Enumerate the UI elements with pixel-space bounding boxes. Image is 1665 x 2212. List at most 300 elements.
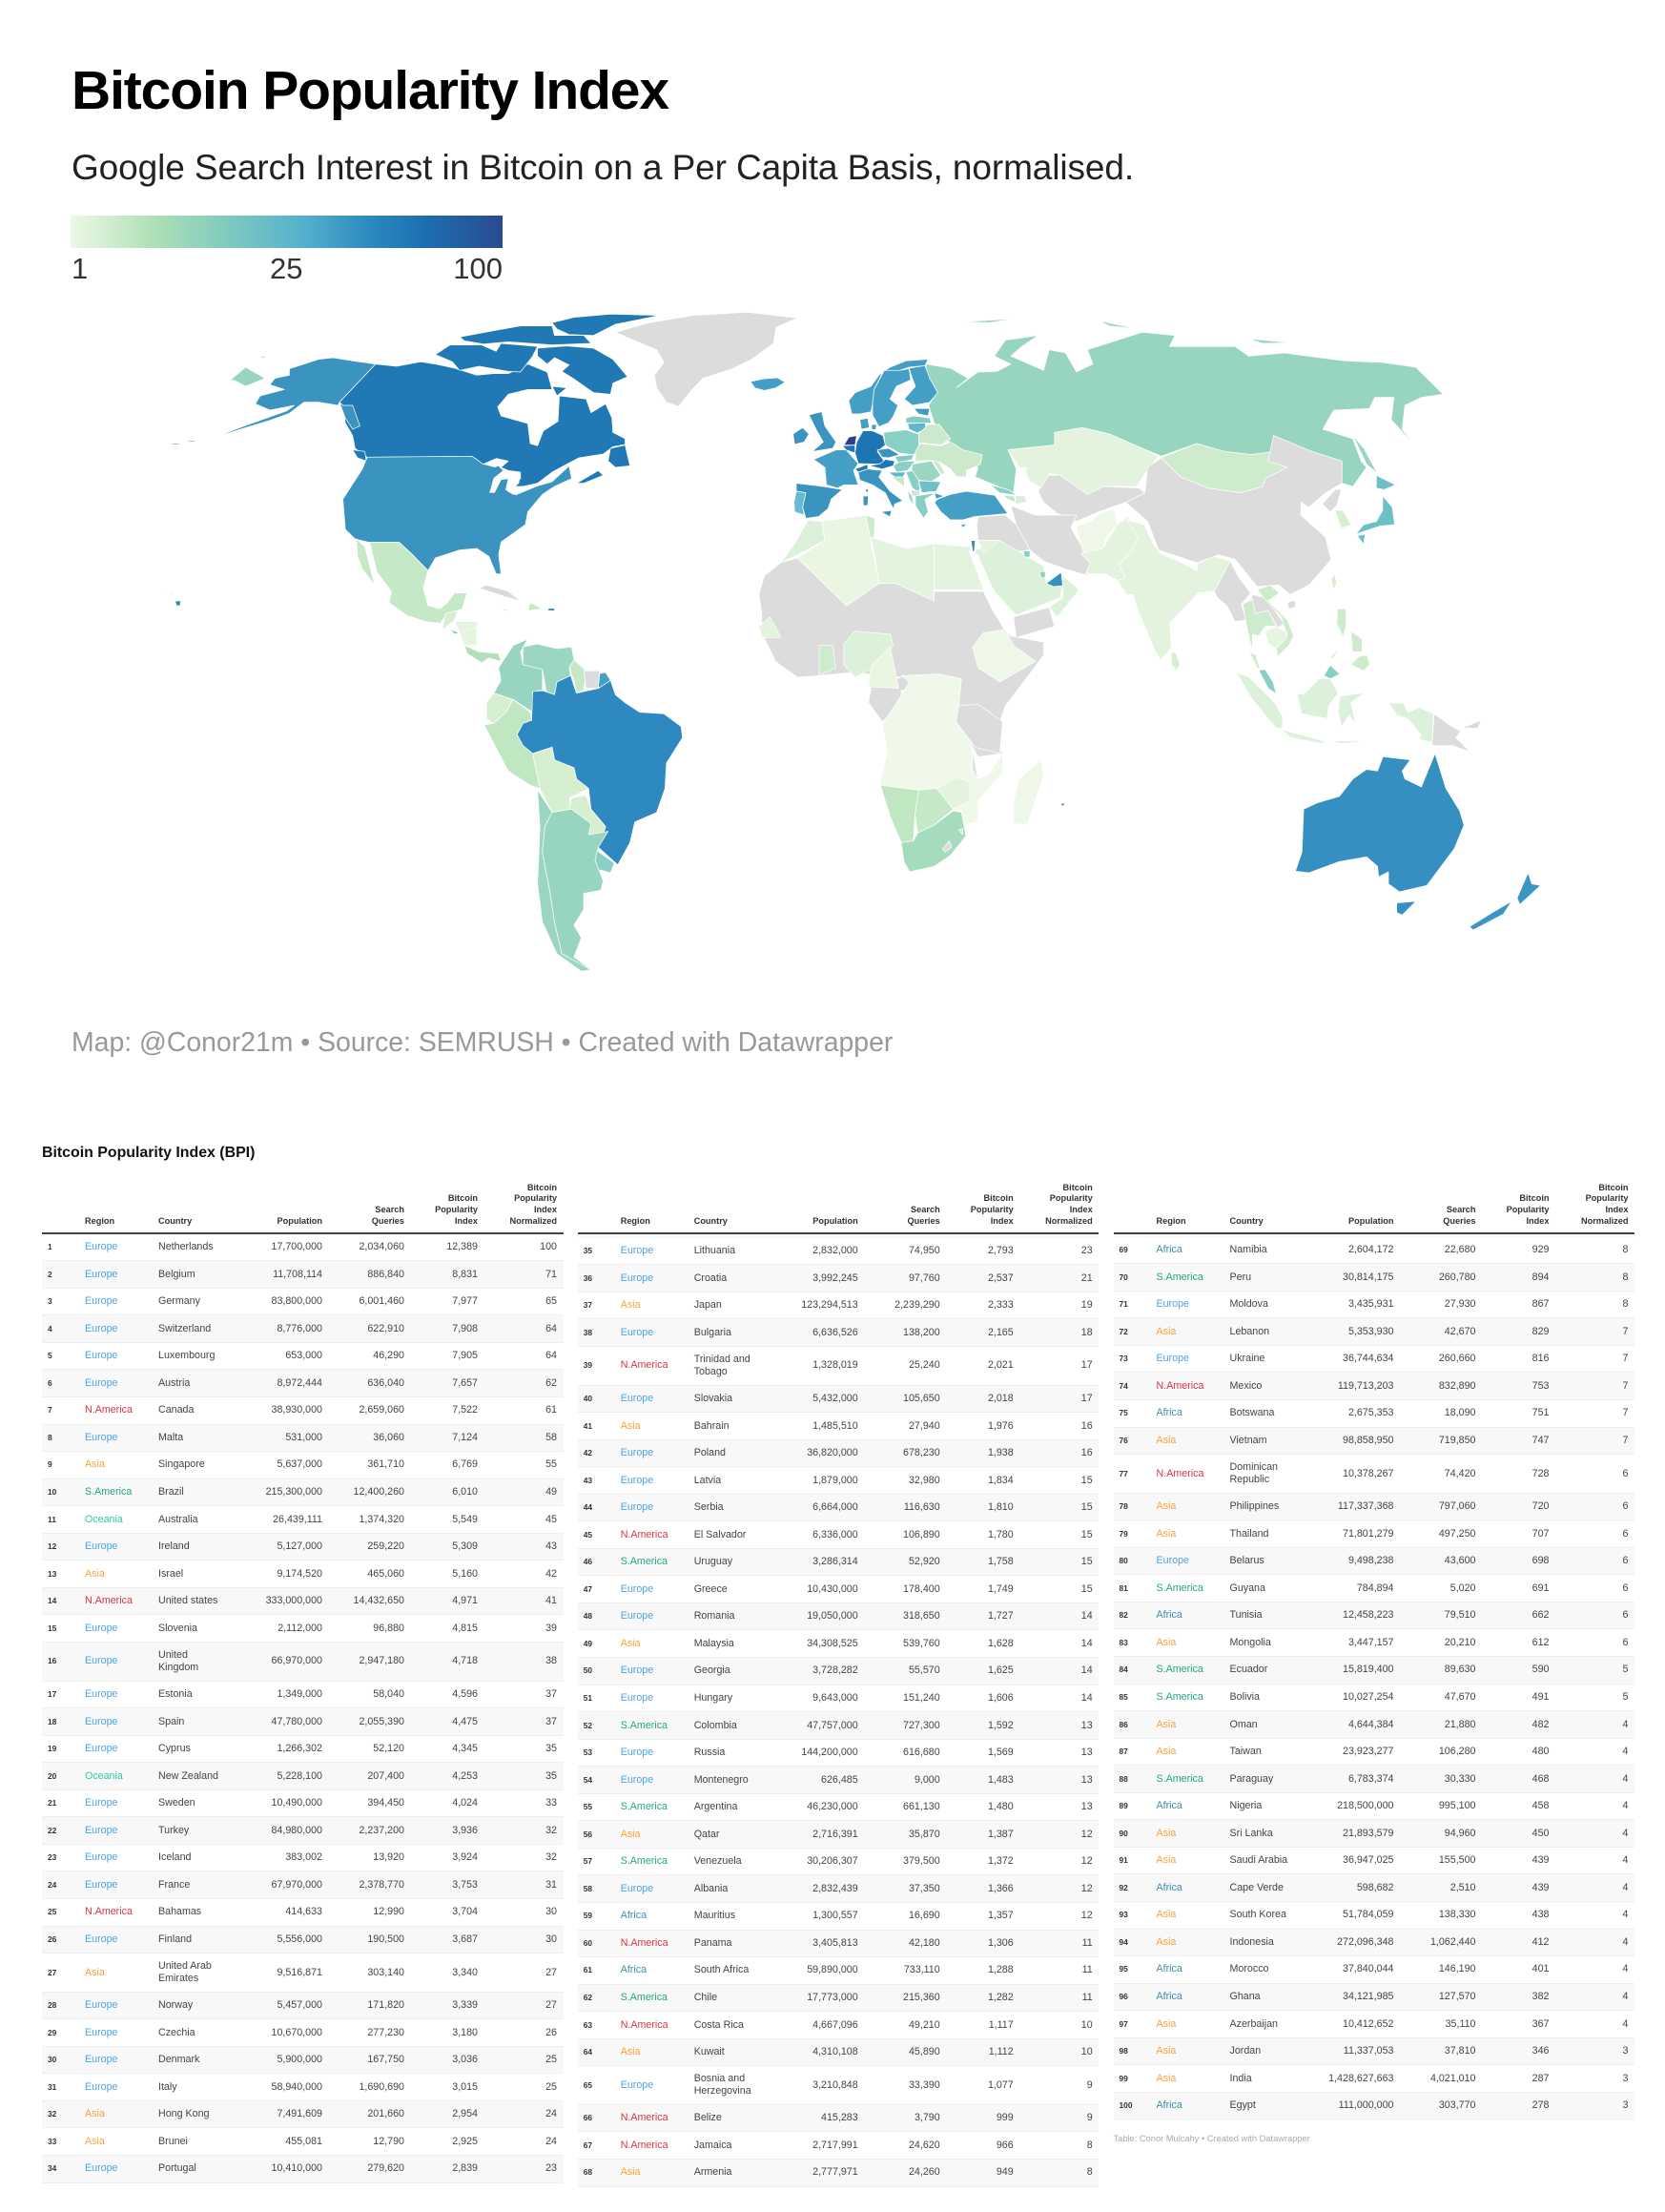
table rows: Chile: [694, 1992, 717, 2003]
table rows: 4: [48, 1324, 52, 1333]
table rows: N.America: [621, 2112, 668, 2123]
table rows: 4: [1623, 1936, 1629, 1948]
table rows: 42,180: [909, 1937, 940, 1949]
table rows: 19: [48, 1744, 56, 1753]
table rows: S.America: [621, 1556, 668, 1567]
table header: Country: [694, 1216, 728, 1226]
table rows: Azerbaijan: [1230, 2018, 1278, 2030]
Colombia: [494, 639, 543, 713]
Myanmar: [1214, 561, 1251, 622]
table rows: 3,728,282: [812, 1664, 858, 1676]
table rows: 626,485: [821, 1774, 858, 1786]
North Korea: [1323, 489, 1342, 512]
table rows: 8: [1623, 1271, 1629, 1283]
table rows: 259,220: [367, 1540, 404, 1552]
table rows: 3,704: [452, 1906, 478, 1917]
table rows: Kingdom: [158, 1662, 198, 1673]
table rows: 1,625: [988, 1664, 1014, 1676]
table rows: Denmark: [158, 2054, 199, 2065]
table header: Queries: [1443, 1216, 1476, 1226]
Egypt: [935, 544, 983, 589]
table rows: Taiwan: [1230, 1746, 1262, 1757]
table rows: 886,840: [367, 1269, 404, 1280]
Argentina: [543, 809, 608, 970]
table rows: Europe: [85, 2081, 117, 2093]
table rows: 4,253: [452, 1770, 478, 1782]
table rows: 4: [1623, 1719, 1629, 1730]
table rows: Lebanon: [1230, 1326, 1269, 1337]
table rows: 27: [545, 1967, 557, 1978]
table rows: Africa: [1156, 1244, 1182, 1255]
table rows: 59: [584, 1911, 592, 1920]
table rows: 4: [1623, 1773, 1629, 1785]
table rows: 678,230: [903, 1447, 940, 1458]
table rows: 12: [1081, 1910, 1093, 1921]
table rows: 29: [48, 2028, 56, 2037]
Central Asia: [1038, 475, 1145, 522]
Israel: [971, 541, 976, 551]
table rows: 318,650: [903, 1610, 940, 1622]
table rows: 719,850: [1439, 1435, 1476, 1446]
table rows: 9,516,871: [277, 1967, 322, 1978]
table rows: 9: [48, 1459, 52, 1469]
table rows: 5: [1623, 1664, 1629, 1675]
table rows: 60: [584, 1938, 592, 1948]
table rows: 117,337,368: [1338, 1500, 1394, 1512]
table rows: 111,000,000: [1339, 2099, 1394, 2111]
table rows: 30: [545, 1933, 557, 1945]
table rows: 97,760: [909, 1272, 940, 1284]
table rows: 31: [545, 1879, 557, 1891]
table rows: 30: [48, 2055, 56, 2064]
table rows: 1,592: [988, 1720, 1014, 1731]
table rows: Qatar: [694, 1829, 719, 1840]
table header: Popularity: [435, 1205, 478, 1214]
table rows: 10,670,000: [271, 2027, 322, 2038]
table rows: S.America: [85, 1486, 132, 1498]
table rows: 38: [584, 1328, 592, 1337]
table rows: 100: [1120, 2100, 1132, 2110]
table rows: 171,820: [367, 1999, 404, 2011]
table rows: 2,537: [988, 1272, 1014, 1284]
table rows: 468: [1532, 1773, 1549, 1785]
table rows: Belgium: [158, 1269, 195, 1280]
Portugal: [794, 491, 806, 515]
table rows: 6: [1623, 1500, 1629, 1512]
table rows: 999: [997, 2112, 1014, 2123]
table rows: 361,710: [367, 1458, 404, 1470]
Sri Lanka: [1171, 651, 1180, 671]
table header: [578, 1166, 1099, 1234]
table rows: 20: [48, 1771, 56, 1781]
table rows: 69: [1120, 1245, 1128, 1254]
table rows: 439: [1532, 1882, 1549, 1893]
table rows: Bahamas: [158, 1906, 201, 1917]
table rows: 12,458,223: [1343, 1609, 1394, 1621]
table rows: 94,960: [1445, 1828, 1476, 1839]
table rows: 1,372: [988, 1855, 1014, 1867]
table rows: Ukraine: [1230, 1353, 1264, 1364]
table rows: Herzegovina: [694, 2085, 751, 2097]
table rows: 138,330: [1439, 1909, 1476, 1920]
table rows: Europe: [85, 1879, 117, 1891]
table rows: N.America: [621, 1529, 668, 1540]
table rows: 24,620: [909, 2140, 940, 2151]
table rows: 24: [545, 2136, 557, 2147]
table rows: 77: [1120, 1469, 1128, 1478]
table rows: Africa: [621, 1964, 647, 1975]
table rows: 61: [584, 1965, 592, 1974]
Thailand: [1243, 599, 1276, 670]
table rows: 3,435,931: [1348, 1298, 1394, 1310]
table rows: 5,228,100: [277, 1770, 322, 1782]
table rows: Asia: [1156, 1500, 1176, 1512]
table rows: 747: [1532, 1435, 1549, 1446]
Greenland: [615, 312, 798, 406]
table rows: 22: [48, 1826, 56, 1835]
South America: [484, 639, 683, 971]
Ecuador: [486, 693, 513, 723]
table rows: 13: [48, 1569, 56, 1579]
table rows: 367: [1532, 2018, 1549, 2030]
table rows: 18: [48, 1717, 56, 1726]
table rows: 401: [1532, 1963, 1549, 1974]
table rows: 4,644,384: [1348, 1719, 1394, 1730]
table rows: 106,280: [1439, 1746, 1476, 1757]
table rows: Republic: [1230, 1474, 1269, 1485]
table rows: Europe: [85, 1269, 117, 1280]
table rows: 7,124: [452, 1432, 478, 1443]
table rows: Jamaica: [694, 2140, 731, 2151]
table rows: 80: [1120, 1556, 1128, 1565]
table rows: 1,428,627,663: [1328, 2073, 1394, 2084]
table rows: 4: [1623, 1854, 1629, 1866]
Red Sea: [968, 550, 1014, 636]
table rows: Argentina: [694, 1801, 737, 1812]
Hungary: [894, 461, 915, 472]
table rows: Europe: [85, 1540, 117, 1552]
table rows: 2,112,000: [278, 1623, 322, 1634]
table header: Country: [1230, 1216, 1264, 1226]
table rows: 3,405,813: [812, 1937, 858, 1949]
table rows: 23,923,277: [1343, 1746, 1394, 1757]
Taiwan: [1331, 574, 1337, 589]
table rows: 303,770: [1439, 2099, 1476, 2111]
Philippines: [1330, 609, 1370, 671]
table rows: 215,300,000: [266, 1486, 322, 1498]
table rows: 1,758: [988, 1556, 1014, 1567]
table rows: 11,337,053: [1344, 2045, 1394, 2057]
table rows: [578, 1245, 1099, 2187]
table rows: 167,750: [367, 2054, 404, 2065]
table rows: 14: [48, 1596, 56, 1605]
table rows: Bolivia: [1230, 1691, 1260, 1703]
table header: Search: [911, 1205, 940, 1214]
table rows: 56: [584, 1830, 592, 1839]
table rows: 67,970,000: [271, 1879, 322, 1891]
Peru: [484, 699, 540, 789]
table rows: 178,400: [903, 1583, 940, 1595]
table rows: 36,060: [373, 1432, 404, 1443]
table rows: 151,240: [903, 1692, 940, 1704]
table rows: 1,976: [988, 1420, 1014, 1432]
table rows: 5,020: [1450, 1582, 1476, 1594]
table rows: Ecuador: [1230, 1664, 1267, 1675]
table rows: 24: [545, 2108, 557, 2119]
table rows: 4: [1623, 2018, 1629, 2030]
table rows: Brunei: [158, 2136, 188, 2147]
table rows: N.America: [621, 2019, 668, 2031]
table rows: 949: [997, 2166, 1014, 2178]
table rows: 1,328,019: [812, 1359, 858, 1371]
table rows: Germany: [158, 1295, 200, 1307]
table rows: 18: [1081, 1327, 1093, 1338]
table rows: 43: [584, 1476, 592, 1485]
table rows: 8: [1087, 2166, 1093, 2178]
table rows: 2,659,060: [359, 1404, 404, 1416]
table rows: 14: [1081, 1664, 1093, 1676]
table rows: 5,160: [452, 1568, 478, 1580]
table rows: Africa: [1156, 1882, 1182, 1893]
table rows: 382: [1532, 1991, 1549, 2002]
Norway: [849, 360, 928, 414]
table header: [42, 1166, 563, 1234]
table rows: 23: [1081, 1245, 1093, 1256]
table rows: 10,027,254: [1343, 1691, 1394, 1703]
table header: Queries: [372, 1216, 404, 1226]
table rows: Europe: [85, 1655, 117, 1666]
Malaysia: [1259, 665, 1340, 694]
Gulf states: [1023, 551, 1045, 578]
Bosnia and Herzegovina: [892, 477, 904, 486]
table rows: 383,002: [285, 1851, 322, 1863]
table rows: 106,890: [903, 1529, 940, 1540]
table rows: 1,349,000: [277, 1688, 322, 1700]
table rows: S.America: [621, 1855, 668, 1867]
table rows: 13,920: [373, 1851, 404, 1863]
table rows: 21: [48, 1798, 56, 1808]
table rows: 9,000: [915, 1774, 940, 1786]
table rows: 966: [997, 2140, 1014, 2151]
table rows: 458: [1532, 1800, 1549, 1811]
Nigeria: [844, 631, 894, 677]
table rows: 3,687: [452, 1933, 478, 1945]
table header: Region: [1156, 1216, 1186, 1226]
table rows: 90: [1120, 1829, 1128, 1838]
table rows: 95: [1120, 1964, 1128, 1974]
table rows: Africa: [1156, 1991, 1182, 2002]
table rows: 333,000,000: [266, 1595, 322, 1606]
table rows: 8,972,444: [277, 1377, 322, 1389]
table rows: Europe: [85, 1851, 117, 1863]
table header: Popularity: [1050, 1193, 1093, 1203]
table rows: 17: [1081, 1393, 1093, 1404]
table rows: 2,954: [452, 2108, 478, 2119]
table rows: 720: [1532, 1500, 1549, 1512]
Senegal: [759, 617, 781, 637]
table rows: 1,485,510: [812, 1420, 858, 1432]
table rows: 88: [1120, 1774, 1128, 1784]
table rows: 39: [545, 1623, 557, 1634]
table rows: 54: [584, 1775, 592, 1785]
table rows: 4: [1623, 1882, 1629, 1893]
table rows: 455,081: [285, 2136, 322, 2147]
table rows: 13: [1081, 1801, 1093, 1812]
table rows: 653,000: [285, 1350, 322, 1361]
Namibia: [880, 785, 919, 842]
table rows: 2,055,390: [359, 1716, 404, 1727]
table rows: 34,121,985: [1343, 1991, 1394, 2002]
Iran: [1011, 506, 1093, 575]
table header: Index: [1606, 1205, 1629, 1214]
table rows: Saudi Arabia: [1230, 1854, 1287, 1866]
table rows: Asia: [1156, 1326, 1176, 1337]
table rows: 480: [1532, 1746, 1549, 1757]
table rows: Vietnam: [1230, 1435, 1267, 1446]
table rows: Europe: [621, 1475, 653, 1486]
table rows: Panama: [694, 1937, 732, 1949]
table rows: 1,306: [988, 1937, 1014, 1949]
table rows: 439: [1532, 1854, 1549, 1866]
table rows: 41: [584, 1421, 592, 1431]
Tanzania and Malawi: [956, 704, 1002, 779]
table rows: Europe: [85, 1323, 117, 1334]
table rows: 11: [1082, 1964, 1093, 1975]
table rows: 6,010: [452, 1486, 478, 1498]
table header: Population: [812, 1216, 858, 1226]
table rows: Africa: [1156, 1963, 1182, 1974]
table rows: Europe: [85, 1797, 117, 1809]
table rows: Ghana: [1230, 1991, 1261, 2002]
table rows: 63: [584, 2020, 592, 2030]
table rows: 44: [584, 1502, 592, 1512]
table rows: 37: [545, 1688, 557, 1700]
table rows: 31: [48, 2082, 56, 2092]
table rows: Brazil: [158, 1486, 184, 1498]
table rows: Belarus: [1230, 1555, 1264, 1566]
table rows: 36,820,000: [807, 1447, 858, 1458]
Austria: [870, 460, 894, 469]
table rows: 465,060: [367, 1568, 404, 1580]
table rows: 7: [1623, 1326, 1629, 1337]
table rows: Slovenia: [158, 1623, 197, 1634]
table rows: 53: [584, 1747, 592, 1757]
table rows: Asia: [1156, 2073, 1176, 2084]
table rows: 3,339: [452, 1999, 478, 2011]
table rows: Asia: [85, 2136, 105, 2147]
table rows: 1,117: [989, 2019, 1014, 2031]
table rows: 30,206,307: [807, 1855, 858, 1867]
table header: Bitcoin: [527, 1183, 557, 1192]
table rows: Europe: [621, 1883, 653, 1894]
table rows: 42: [584, 1448, 592, 1457]
table rows: 42,670: [1445, 1326, 1476, 1337]
table rows: 4: [1623, 1909, 1629, 1920]
table rows: 6: [1623, 1528, 1629, 1540]
table rows: 23: [48, 1852, 56, 1862]
table rows: 62: [545, 1377, 557, 1389]
table rows: 3,790: [915, 2112, 940, 2123]
table rows: 119,713,203: [1338, 1380, 1394, 1392]
Lithuania: [908, 423, 927, 433]
table rows: Europe: [85, 1350, 117, 1361]
table rows: 995,100: [1439, 1800, 1476, 1811]
table rows: 201,660: [367, 2108, 404, 2119]
table rows: 71,801,279: [1343, 1528, 1394, 1540]
Sweden: [873, 369, 911, 426]
Denmark: [860, 418, 876, 430]
Morocco: [781, 520, 825, 563]
table rows: Egypt: [1230, 2099, 1256, 2111]
table rows: 5,127,000: [277, 1540, 322, 1552]
table rows: 6: [1623, 1609, 1629, 1621]
table rows: Asia: [1156, 1828, 1176, 1839]
table header: Index: [534, 1205, 557, 1214]
table rows: 2: [48, 1270, 52, 1279]
table rows: 99: [1120, 2074, 1128, 2083]
table rows: Kuwait: [694, 2046, 725, 2057]
table source note: Table: Conor Mulcahy • Created with Datawrapper: [1114, 2134, 1310, 2143]
table rows: N.America: [1156, 1468, 1203, 1479]
table rows: S.America: [1156, 1664, 1203, 1675]
table rows: 2,510: [1450, 1882, 1476, 1893]
South and Southeast Asia: [1076, 475, 1481, 752]
table rows: Botswana: [1230, 1407, 1274, 1418]
table rows: 2,604,172: [1348, 1244, 1394, 1255]
table header: Index: [1070, 1205, 1093, 1214]
table rows: 1,062,440: [1430, 1936, 1476, 1948]
table rows: 9: [1087, 2079, 1093, 2091]
table rows: 15: [48, 1623, 56, 1633]
table rows: 138,200: [903, 1327, 940, 1338]
table rows: Europe: [621, 1327, 653, 1338]
table rows: 4,345: [452, 1743, 478, 1754]
table rows: 728: [1532, 1468, 1549, 1479]
table rows: 43,600: [1445, 1555, 1476, 1566]
table rows: Oman: [1230, 1719, 1258, 1730]
Armenia: [1003, 495, 1016, 503]
table rows: 11,708,114: [273, 1269, 322, 1280]
table rows: 12: [48, 1541, 56, 1551]
table rows: 751: [1532, 1407, 1549, 1418]
table rows: 6: [1623, 1468, 1629, 1479]
Alaska: [173, 358, 376, 444]
table rows: 25,240: [909, 1359, 940, 1371]
Ghana: [819, 646, 835, 675]
table header: Normalized: [1581, 1216, 1629, 1226]
table rows: 37,810: [1445, 2045, 1476, 2057]
table header: Bitcoin: [1519, 1193, 1549, 1203]
table rows: 698: [1532, 1555, 1549, 1566]
table rows: Asia: [621, 2166, 640, 2178]
table rows: Oceania: [85, 1514, 123, 1525]
table rows: New Zealand: [158, 1770, 218, 1782]
table rows: 482: [1532, 1719, 1549, 1730]
table rows: 260,660: [1439, 1353, 1476, 1364]
table rows: 55: [545, 1458, 557, 1470]
table rows: 70: [1120, 1272, 1128, 1282]
table rows: 598,682: [1357, 1882, 1394, 1893]
table header: Popularity: [971, 1205, 1014, 1214]
table rows: 61: [545, 1404, 557, 1416]
table rows: 491: [1532, 1691, 1549, 1703]
table rows: 3,753: [452, 1879, 478, 1891]
table rows: 12: [1081, 1855, 1093, 1867]
table rows: Netherlands: [158, 1241, 214, 1252]
table rows: 6: [1623, 1637, 1629, 1648]
Venezuela: [523, 644, 574, 696]
table rows: 10,412,652: [1343, 2018, 1394, 2030]
